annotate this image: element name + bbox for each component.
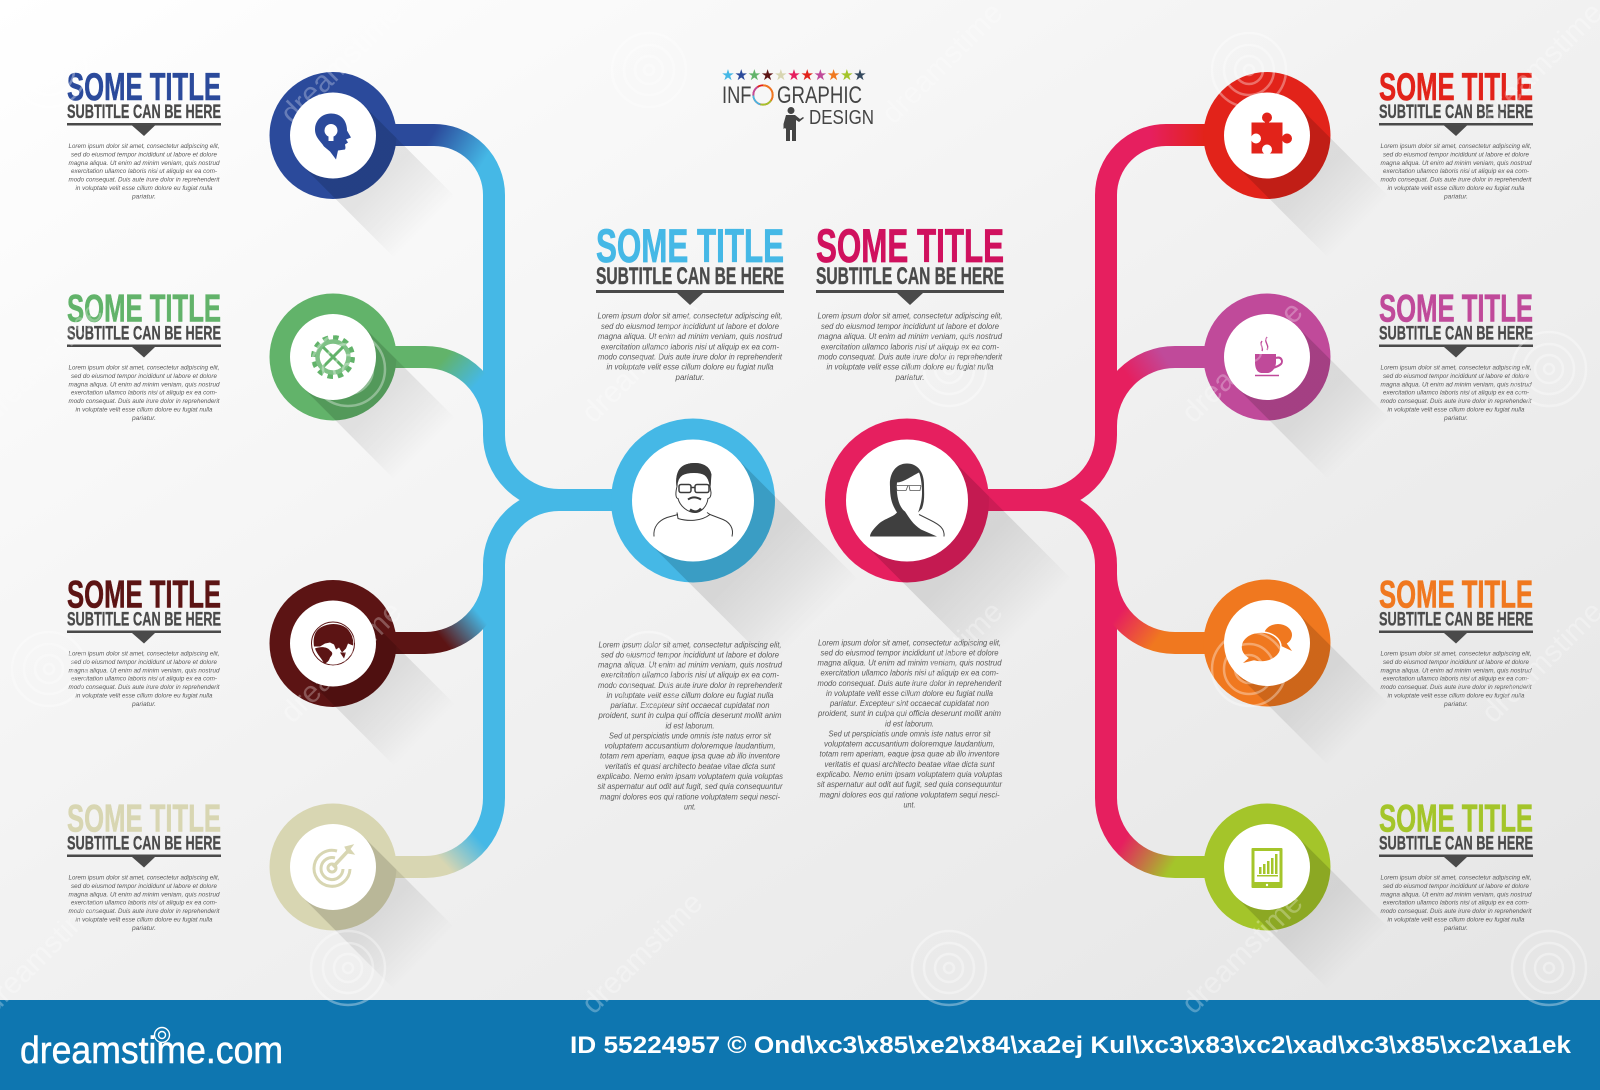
text block: navy: SUBTITLE CAN BE HERE [67, 101, 221, 123]
text block: navy: magna aliqua. Ut enim ad minim veniam, quis nostrud [68, 160, 220, 167]
text block: magenta: Lorem ipsum dolor sit amet, consectetur adipiscing elit, [1380, 364, 1532, 372]
center left long text: pariatur. Excepteur sint occaecat cupidatat non [610, 701, 770, 710]
center right short text: sed do eiusmod tempor incididunt ut labore et dolore [821, 322, 999, 331]
node: navy head icon [270, 72, 440, 242]
text block: lime: magna aliqua. Ut enim ad minim veniam, quis nostrud [1380, 891, 1532, 898]
text: dreamstime [875, 0, 1009, 130]
center left long text: magni dolores eos qui ratione voluptatem sequi nesci- [600, 792, 780, 801]
text block: maroon: SUBTITLE CAN BE HERE [67, 608, 221, 630]
center left long text: sit aspernatur aut odit aut fugit, sed quia consequuntur [598, 782, 783, 791]
text block: red: modo consequat. Duis aute irure dolor in reprehenderit [1380, 177, 1533, 184]
connector: navy branch [390, 135, 494, 205]
text block: magenta: magna aliqua. Ut enim ad minim veniam, quis nostrud [1380, 381, 1532, 388]
text block: beige: pariatur. [131, 925, 156, 932]
text block: maroon: SOME TITLE [67, 574, 221, 616]
center left short text: Lorem ipsum dolor sit amet, consectetur adipiscing elit, [598, 312, 782, 321]
node: center pink woman [825, 418, 1054, 647]
node: orange chat icon [1204, 580, 1372, 748]
text block: magenta [1379, 288, 1533, 422]
center left long text: modo consequat. Duis aute irure dolor in reprehenderit [598, 681, 783, 690]
rainbow O ring [753, 85, 773, 105]
node: green gear icon [270, 294, 439, 463]
center left text heading: SUBTITLE CAN BE HERE [596, 263, 784, 290]
logo: infographic design [721, 66, 874, 141]
text block: green: SOME TITLE [67, 288, 221, 330]
center left text heading [596, 220, 784, 305]
logo: infographic design: DESIGN [809, 106, 874, 129]
connector: magenta branch [1106, 357, 1210, 426]
center right long text: Lorem ipsum dolor sit amet, consectetur adipiscing elit, [818, 638, 1001, 647]
center right long text: explicabo. Nemo enim ipsam voluptatem quia voluptas [816, 770, 1002, 779]
node: beige target icon [270, 804, 438, 972]
footer bar [0, 1000, 1600, 1090]
text block: navy [67, 66, 221, 200]
text block: magenta: modo consequat. Duis aute irure dolor in reprehenderit [1380, 398, 1533, 405]
icon: globe [312, 622, 354, 665]
text block: red: pariatur. [1443, 193, 1468, 200]
text: dreamstime [274, 595, 408, 729]
node: magenta cup icon [1204, 294, 1372, 462]
center right long text: unt. [904, 800, 916, 809]
text block: maroon: exercitation ullamco laboris nisi ut aliquip ex ea com- [71, 676, 218, 683]
center left long text: unt. [684, 802, 696, 811]
icon: tablet chart [1252, 848, 1282, 888]
text block: navy: pariatur. [131, 193, 156, 200]
center left short text: magna aliqua. Ut enim ad minim veniam, quis nostrud [598, 332, 782, 341]
center left long text: in voluptate velit esse cillum dolore eu fugiat nulla [606, 691, 774, 700]
text block: maroon: sed do eiusmod tempor incididunt ut labore et dolore [71, 659, 217, 666]
text block: maroon: pariatur. [131, 701, 156, 708]
center right long text: pariatur. Excepteur sint occaecat cupidatat non [829, 699, 989, 708]
text block: navy: exercitation ullamco laboris nisi ut aliquip ex ea com- [71, 168, 218, 175]
text block: green: SUBTITLE CAN BE HERE [67, 322, 221, 344]
text block: green: pariatur. [131, 415, 156, 422]
text block: lime: exercitation ullamco laboris nisi ut aliquip ex ea com- [1383, 900, 1530, 907]
center left short text: sed do eiusmod tempor incididunt ut labore et dolore [601, 322, 779, 331]
text block: orange: magna aliqua. Ut enim ad minim veniam, quis nostrud [1380, 667, 1532, 674]
text: dreamstime [875, 595, 1009, 729]
center left long text: proident, sunt in culpa qui officia deserunt mollit anim [598, 711, 782, 720]
text block: beige: SOME TITLE [67, 798, 221, 840]
center left short text [598, 312, 783, 382]
footer logo: dreamstime.com [20, 1030, 283, 1072]
center left long text: Sed ut perspiciatis unde omnis iste natus error sit [609, 732, 772, 740]
text block: orange: pariatur. [1443, 701, 1468, 708]
text block: maroon [67, 574, 221, 708]
center left text heading: SOME TITLE [596, 220, 784, 273]
center right short text [818, 312, 1003, 382]
logo: infographic design: INF [722, 82, 752, 109]
text block: beige: magna aliqua. Ut enim ad minim veniam, quis nostrud [68, 891, 220, 898]
center left short text: in voluptate velit esse cillum dolore eu fugiat nulla [606, 363, 774, 372]
text block: beige: modo consequat. Duis aute irure dolor in reprehenderit [68, 908, 221, 915]
stars row: ★ [721, 66, 735, 84]
text block: green: modo consequat. Duis aute irure dolor in reprehenderit [68, 398, 221, 405]
center right long text: exercitation ullamco laboris nisi ut aliquip ex ea com- [820, 669, 999, 678]
text block: magenta: exercitation ullamco laboris nisi ut aliquip ex ea com- [1383, 390, 1530, 397]
text block: green: magna aliqua. Ut enim ad minim veniam, quis nostrud [68, 381, 220, 388]
center right long text [816, 638, 1002, 809]
connector: center pink trunk [988, 200, 1106, 790]
connector tree: blue left [390, 135, 612, 867]
text block: green: in voluptate velit esse cillum dolore eu fugiat nulla [76, 406, 213, 414]
text block: lime: Lorem ipsum dolor sit amet, consectetur adipiscing elit, [1380, 874, 1532, 882]
text block: red: exercitation ullamco laboris nisi ut aliquip ex ea com- [1383, 168, 1530, 175]
text block: orange: modo consequat. Duis aute irure dolor in reprehenderit [1380, 684, 1533, 691]
icon: puzzle piece [1251, 112, 1292, 154]
node: red puzzle icon [1204, 72, 1373, 242]
footer credit: ID 55224957 © Ond\xc3\x85\xe2\x84\xa2ej Kul\xc3\x83\xc2\xad\xc3\x85\xc2\xa1ek [570, 1032, 1572, 1059]
connector: orange branch [1106, 574, 1210, 643]
center left short text: modo consequat. Duis aute irure dolor in reprehenderit [598, 352, 783, 362]
stars row: ★ [734, 66, 748, 84]
text block: magenta: sed do eiusmod tempor incididunt ut labore et dolore [1383, 373, 1529, 380]
text block: maroon: modo consequat. Duis aute irure dolor in reprehenderit [68, 684, 221, 691]
icon: man portrait [654, 464, 733, 536]
text block: maroon: Lorem ipsum dolor sit amet, consectetur adipiscing elit, [68, 650, 220, 658]
text block: navy: in voluptate velit esse cillum dolore eu fugiat nulla [76, 185, 213, 192]
stars row [721, 66, 867, 84]
icon: footer spiral [154, 1028, 170, 1042]
stars row: ★ [787, 66, 801, 84]
node: maroon globe icon [270, 580, 439, 750]
stars row: ★ [853, 66, 867, 84]
connector: red branch [1106, 135, 1210, 205]
text block: beige: Lorem ipsum dolor sit amet, consectetur adipiscing elit, [68, 874, 220, 882]
icon: target with arrow [314, 845, 354, 886]
text block: orange: in voluptate velit esse cillum dolore eu fugiat nulla [1388, 692, 1525, 700]
icon: gear [314, 338, 352, 376]
text block: green: Lorem ipsum dolor sit amet, consectetur adipiscing elit, [68, 364, 220, 372]
center left long text: voluptatem accusantium doloremque laudantium, [604, 742, 776, 751]
center right long text: in voluptate velit esse cillum dolore eu fugiat nulla [826, 689, 993, 698]
center right long text: totam rem aperiam, eaque ipsa quae ab illo inventore [820, 750, 1000, 759]
text block: beige: SUBTITLE CAN BE HERE [67, 832, 221, 854]
text: dreamstime [575, 886, 709, 1020]
center left long text [597, 640, 783, 811]
center right long text: modo consequat. Duis aute irure dolor in reprehenderit [818, 679, 1002, 688]
text block: magenta: pariatur. [1443, 415, 1468, 422]
logo: infographic design: GRAPHIC [777, 82, 862, 109]
icon: head with bulb [315, 114, 351, 160]
text: dreamstime [575, 295, 709, 429]
text block: red: in voluptate velit esse cillum dolore eu fugiat nulla [1388, 185, 1525, 192]
center right short text: Lorem ipsum dolor sit amet, consectetur adipiscing elit, [818, 312, 1002, 321]
text block: lime: in voluptate velit esse cillum dolore eu fugiat nulla [1388, 916, 1525, 924]
center right text heading: SUBTITLE CAN BE HERE [816, 263, 1004, 290]
center right short text: modo consequat. Duis aute irure dolor in reprehenderit [818, 352, 1003, 362]
text block: orange: sed do eiusmod tempor incididunt ut labore et dolore [1383, 659, 1529, 666]
text block: navy: Lorem ipsum dolor sit amet, consectetur adipiscing elit, [68, 143, 220, 150]
text block: magenta: in voluptate velit esse cillum dolore eu fugiat nulla [1388, 406, 1525, 414]
text block: red: Lorem ipsum dolor sit amet, consectetur adipiscing elit, [1380, 143, 1532, 150]
stars row: ★ [840, 66, 854, 84]
center left short text: pariatur. [675, 373, 704, 382]
center left long text: sed do eiusmod tempor incididunt ut labore et dolore [601, 650, 779, 659]
center left long text: totam rem aperiam, eaque ipsa quae ab illo inventore [600, 752, 780, 761]
center right long text: proident, sunt in culpa qui officia deserunt mollit anim [817, 709, 1001, 718]
text block: lime: modo consequat. Duis aute irure dolor in reprehenderit [1380, 908, 1533, 915]
center right long text: magna aliqua. Ut enim ad minim veniam, quis nostrud [818, 659, 1002, 668]
connector: beige branch [390, 785, 494, 867]
text block: navy: modo consequat. Duis aute irure dolor in reprehenderit [68, 177, 221, 184]
center right long text: veritatis et quasi architecto beatae vitae dicta sunt [824, 760, 995, 769]
node: center blue man [612, 418, 840, 647]
text block: orange: exercitation ullamco laboris nisi ut aliquip ex ea com- [1383, 676, 1530, 683]
stars row: ★ [800, 66, 814, 84]
center right long text: Sed ut perspiciatis unde omnis iste natus error sit [828, 730, 991, 738]
center left long text: exercitation ullamco laboris nisi ut aliquip ex ea com- [601, 671, 779, 680]
stars row: ★ [814, 66, 827, 84]
text block: navy: SOME TITLE [67, 66, 221, 109]
text block: red: sed do eiusmod tempor incididunt ut labore et dolore [1383, 151, 1529, 158]
connector tree: pink right [988, 135, 1210, 867]
text block: green: sed do eiusmod tempor incididunt ut labore et dolore [71, 373, 217, 380]
text block: lime: pariatur. [1443, 925, 1468, 932]
center left long text: id est laborum. [666, 721, 714, 730]
text block: beige: in voluptate velit esse cillum dolore eu fugiat nulla [76, 916, 213, 924]
icon: chat bubbles [1241, 624, 1292, 663]
stars row: ★ [761, 66, 774, 84]
connector: center blue trunk [494, 200, 612, 790]
text block: beige: exercitation ullamco laboris nisi ut aliquip ex ea com- [71, 900, 218, 907]
center right long text: sit aspernatur aut odit aut fugit, sed quia consequuntur [817, 780, 1002, 789]
center right text heading [816, 220, 1004, 305]
icon: presenter figure [784, 107, 804, 141]
stars row: ★ [827, 66, 840, 84]
text block: maroon: magna aliqua. Ut enim ad minim veniam, quis nostrud [68, 667, 220, 674]
text block: beige [67, 798, 221, 932]
text block: red: magna aliqua. Ut enim ad minim veniam, quis nostrud [1380, 160, 1532, 167]
text block: beige: sed do eiusmod tempor incididunt ut labore et dolore [71, 883, 217, 890]
center left long text: explicabo. Nemo enim ipsam voluptatem quia voluptas [597, 772, 783, 781]
text block: lime [1379, 798, 1533, 932]
text block: lime: sed do eiusmod tempor incididunt ut labore et dolore [1383, 883, 1529, 890]
center right short text: magna aliqua. Ut enim ad minim veniam, quis nostrud [818, 332, 1002, 341]
text block: maroon: in voluptate velit esse cillum dolore eu fugiat nulla [76, 692, 213, 700]
text block: orange: Lorem ipsum dolor sit amet, consectetur adipiscing elit, [1380, 650, 1532, 658]
center right long text: voluptatem accusantium doloremque laudantium, [824, 740, 995, 749]
connector: lime branch [1106, 785, 1210, 867]
text: dreamstime [274, 0, 408, 130]
center left long text: magna aliqua. Ut enim ad minim veniam, quis nostrud [598, 661, 782, 670]
stars row: ★ [774, 66, 788, 84]
text block: green [67, 288, 221, 422]
text block: red [1379, 66, 1533, 200]
stars row: ★ [748, 66, 761, 84]
node: lime tablet icon [1204, 804, 1372, 972]
text block: navy: sed do eiusmod tempor incididunt ut labore et dolore [71, 151, 217, 158]
connector: green branch [390, 357, 494, 426]
text: dreamstime [1175, 295, 1309, 429]
icon: coffee cup [1255, 337, 1282, 376]
center right long text: sed do eiusmod tempor incididunt ut labore et dolore [820, 648, 999, 657]
center right short text: pariatur. [895, 373, 924, 382]
text block: orange [1379, 574, 1533, 708]
text block: green: exercitation ullamco laboris nisi ut aliquip ex ea com- [71, 390, 218, 397]
text: dreamstime [1175, 886, 1309, 1020]
center left long text: veritatis et quasi architecto beatae vitae dicta sunt [605, 762, 776, 771]
center left short text: exercitation ullamco laboris nisi ut aliquip ex ea com- [601, 342, 779, 351]
icon: woman portrait [870, 464, 944, 536]
center right long text: id est laborum. [885, 719, 934, 728]
center right short text: exercitation ullamco laboris nisi ut aliquip ex ea com- [821, 342, 999, 351]
center right short text: in voluptate velit esse cillum dolore eu fugiat nulla [826, 363, 994, 372]
center left long text: Lorem ipsum dolor sit amet, consectetur adipiscing elit, [598, 640, 782, 649]
center right long text: magni dolores eos qui ratione voluptatem sequi nesci- [820, 790, 1000, 799]
connector: maroon branch [390, 574, 494, 643]
center right text heading: SOME TITLE [816, 220, 1004, 273]
